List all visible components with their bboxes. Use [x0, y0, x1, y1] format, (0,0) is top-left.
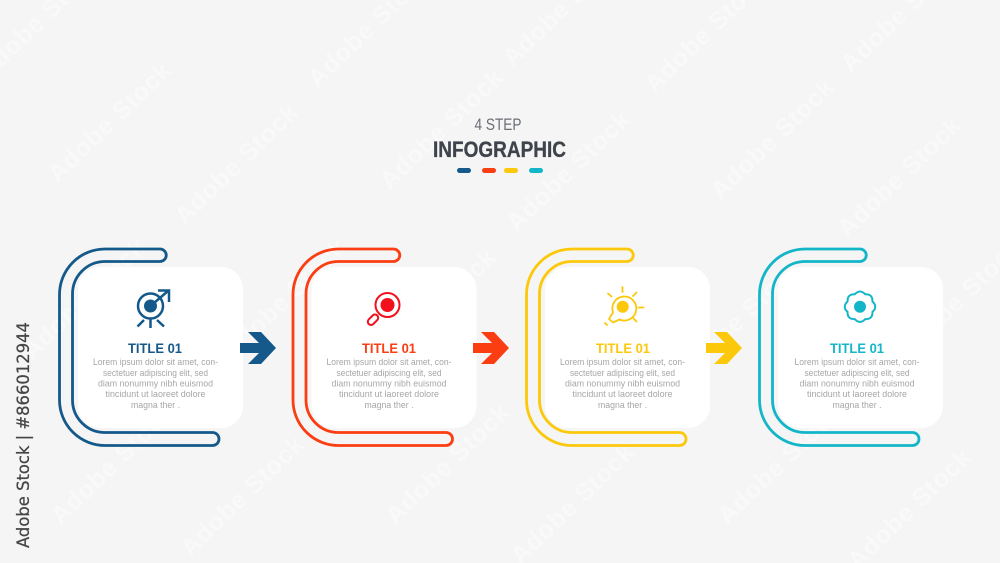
watermark pattern: Adobe Stock [42, 57, 177, 188]
icon: magnifier [366, 293, 400, 326]
icon: light bulb [605, 287, 644, 325]
watermark pattern: Adobe Stock [501, 106, 636, 237]
step 3 outline bracket [526, 249, 686, 446]
step 4 card [778, 267, 943, 428]
step 2 outline bracket [293, 249, 452, 446]
watermark pattern: Adobe Stock [672, 254, 807, 385]
step 2 body text: tincidunt ut laoreet dolore [339, 389, 439, 400]
step 1 body text: sectetuer adipiscing elit, sed [103, 368, 208, 379]
step 3 card [545, 267, 710, 428]
step 3 body text: sectetuer adipiscing elit, sed [570, 368, 675, 379]
step 2 body text: sectetuer adipiscing elit, sed [336, 368, 442, 379]
step 1 body text [93, 357, 218, 411]
panel: step 1 [60, 249, 243, 446]
watermark pattern: Adobe Stock [380, 399, 515, 530]
panel: step 2 [293, 249, 476, 446]
watermark pattern: Adobe Stock [705, 74, 840, 205]
step 4 outline bracket [760, 249, 919, 446]
step 3 body text: magna ther . [598, 400, 647, 411]
step 1 body text: tincidunt ut laoreet dolore [106, 389, 206, 400]
step 2 body text: Lorem ipsum dolor sit amet, con- [326, 357, 452, 368]
watermark pattern: Adobe Stock [712, 399, 847, 530]
arrow: step 1 to 2 [240, 332, 276, 364]
watermark pattern: Adobe Stock [169, 99, 304, 230]
step 4 body text: diam nonummy nibh euismod [800, 378, 914, 390]
step 2 body text: diam nonummy nibh euismod [332, 378, 446, 390]
step 2 body text [326, 357, 452, 411]
step 3 body text: diam nonummy nibh euismod [565, 378, 680, 390]
step 4 body text: sectetuer adipiscing elit, sed [804, 368, 910, 379]
panel: step 4 [760, 249, 943, 446]
watermark pattern: Adobe Stock [175, 431, 310, 562]
watermark pattern: Adobe Stock [17, 234, 152, 365]
heading line: infographic: INFOGRAPHIC [433, 137, 566, 162]
step 4 title: TITLE 01 [830, 340, 884, 356]
icon: badge gear [845, 291, 875, 322]
step 1 outline bracket [60, 249, 219, 446]
step 4 body text: tincidunt ut laoreet dolore [807, 389, 907, 400]
watermark pattern: Adobe Stock [374, 64, 509, 195]
watermark pattern: Adobe Stock [832, 112, 967, 243]
arrow: step 3 to 4 [706, 332, 742, 364]
heading line: 4 step: 4 STEP [474, 115, 522, 134]
step 2 body text: magna ther . [364, 400, 414, 411]
step 4 body text: magna ther . [832, 400, 882, 411]
heading [433, 115, 566, 162]
step 3 title: TITLE 01 [596, 340, 650, 356]
step 2 title: TITLE 01 [362, 340, 416, 356]
step 2 card [312, 267, 476, 428]
watermark pattern: Adobe Stock [45, 399, 180, 530]
step 1 body text: diam nonummy nibh euismod [98, 378, 213, 390]
step 4 body text [794, 357, 920, 411]
step 1 card [78, 267, 243, 428]
watermark pattern: Adobe Stock [367, 244, 502, 375]
icon: target with arrow [138, 290, 169, 328]
step 1 body text: Lorem ipsum dolor sit amet, con- [93, 357, 218, 368]
heading colour dashes [457, 168, 543, 173]
step 1 title: TITLE 01 [128, 340, 182, 356]
side credit text: Adobe Stock | #866012944 [14, 322, 34, 548]
step 3 body text: Lorem ipsum dolor sit amet, con- [560, 357, 685, 368]
watermark pattern: Adobe Stock [217, 234, 352, 365]
step 3 body text [560, 357, 685, 411]
step 3 body text: tincidunt ut laoreet dolore [572, 389, 672, 400]
step 1 body text: magna ther . [131, 400, 180, 411]
step 4 body text: Lorem ipsum dolor sit amet, con- [794, 357, 920, 368]
arrow: step 2 to 3 [473, 332, 509, 364]
panel: step 3 [526, 249, 710, 446]
